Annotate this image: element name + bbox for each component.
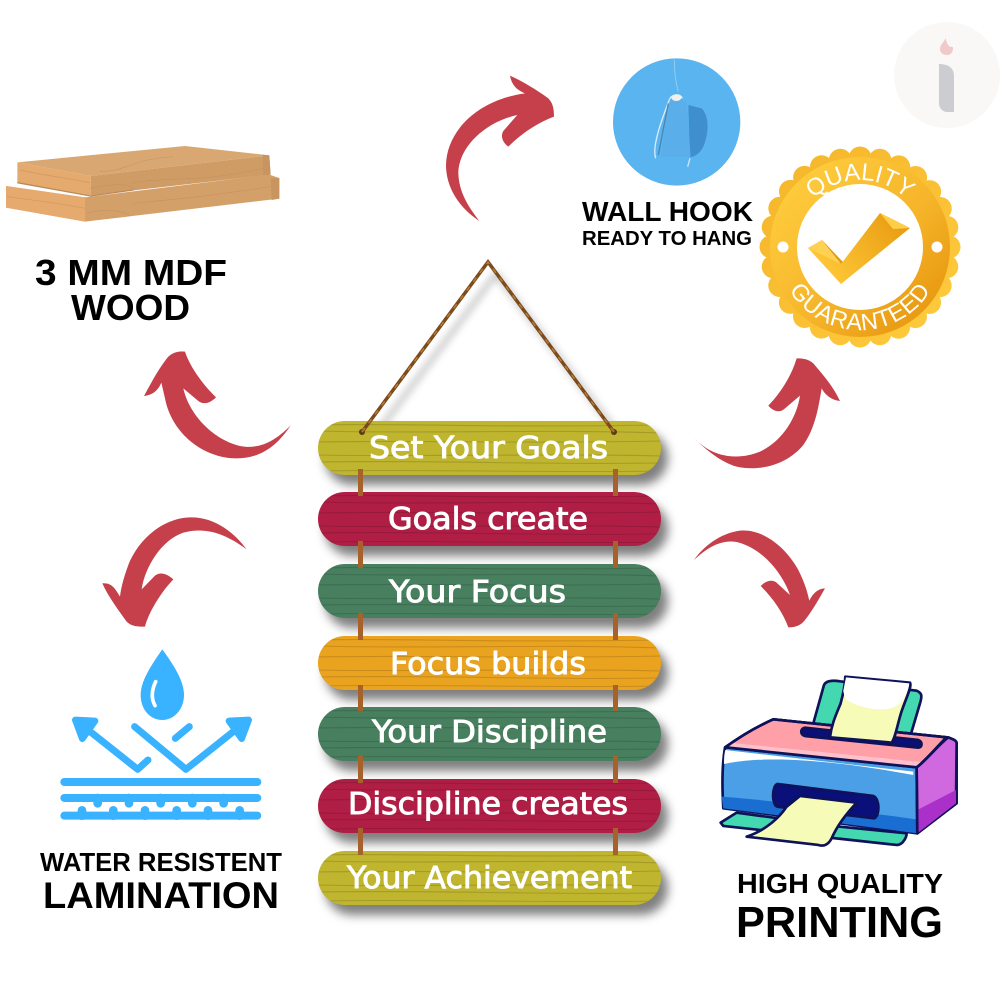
badge check mark [808, 213, 910, 284]
label: wall hook: READY TO HANG [582, 228, 752, 250]
badge text: quality: QUALITY [807, 163, 916, 195]
label: water resistent lamination: LAMINATION [43, 875, 279, 916]
arrow: to water resistant [102, 517, 247, 627]
plank: your focus [318, 564, 668, 628]
plank: your discipline [318, 707, 668, 771]
plank: your achievement: Your Achievement [346, 861, 632, 896]
plank: discipline creates [318, 779, 668, 843]
plank: focus builds: Focus builds [390, 647, 586, 682]
label: water resistent lamination [40, 847, 282, 916]
plank: focus builds [318, 636, 668, 700]
arrow: to wall hook [446, 76, 554, 221]
badge text: guaranteed: GUARANTEED [792, 284, 928, 330]
arrow: to mdf wood [144, 351, 291, 458]
rope shadow [370, 274, 624, 442]
icon: wall hook [613, 58, 740, 186]
plank: your discipline: Your Discipline [371, 715, 607, 750]
icon: quality guaranteed badge [760, 146, 960, 348]
icon: printer [721, 677, 957, 846]
label: 3 mm mdf wood: WOOD [71, 287, 190, 328]
arrow: to printing [694, 530, 825, 627]
watermark logo [894, 22, 1000, 128]
label: water resistent lamination: WATER RESISTENT [40, 847, 282, 877]
label: wall hook [582, 196, 753, 250]
label: wall hook: WALL HOOK [582, 196, 753, 227]
plank: discipline creates: Discipline creates [348, 787, 628, 822]
icon: water resistant lamination [64, 649, 257, 816]
hanging rope [362, 262, 614, 432]
plank: set your goals [318, 421, 668, 485]
plank: your focus: Your Focus [388, 575, 566, 610]
connector rods [358, 469, 618, 855]
label: high quality printing: HIGH QUALITY [737, 868, 943, 899]
plank: goals create: Goals create [388, 502, 588, 537]
label: high quality printing: PRINTING [736, 898, 943, 947]
label: 3 mm mdf wood: 3 MM MDF [35, 252, 227, 293]
plank: set your goals: Set Your Goals [369, 431, 608, 466]
plank: your achievement [318, 851, 668, 915]
label: high quality printing [736, 868, 943, 947]
arrow: to quality badge [694, 358, 840, 468]
icon: wood planks [6, 146, 279, 222]
plank: goals create [318, 492, 668, 556]
label: 3 mm mdf wood [35, 252, 227, 328]
